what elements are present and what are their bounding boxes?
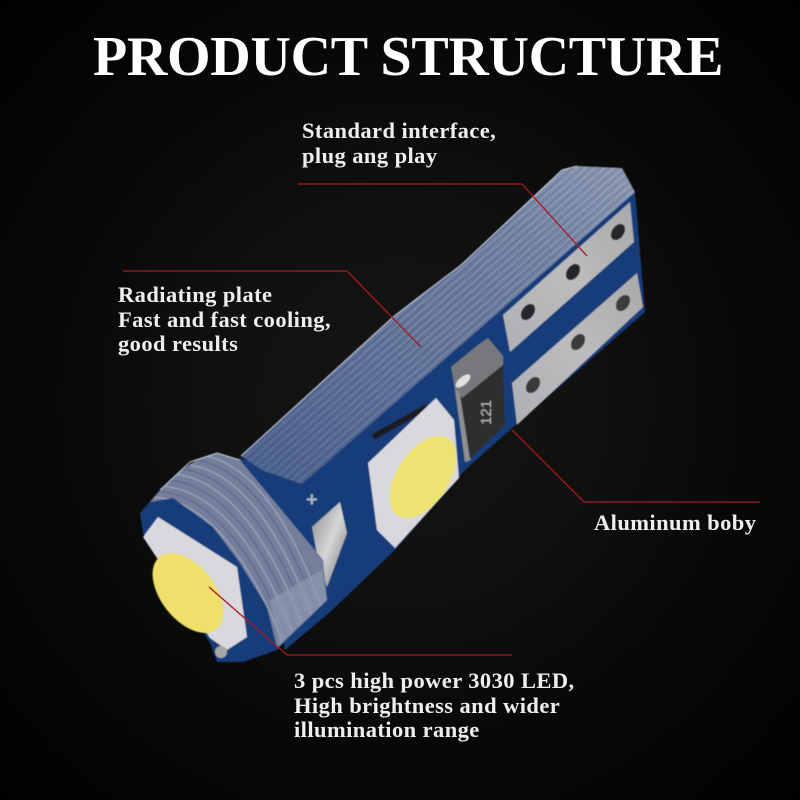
front LED chip bbox=[138, 517, 247, 658]
label: LED: 3 pcs high power 3030 LED, bbox=[294, 668, 575, 693]
label: LED: illumination range bbox=[294, 717, 480, 742]
product photo: T5 LED bulb bbox=[123, 164, 760, 663]
middle LED chip bbox=[368, 398, 470, 548]
resistor bbox=[451, 338, 505, 462]
leader line: LED bbox=[209, 587, 512, 655]
resistor: 121 bbox=[478, 400, 495, 425]
radiating plate bbox=[241, 166, 635, 484]
label: radiating plate: Fast and fast cooling, bbox=[118, 306, 331, 332]
leader line: radiating plate bbox=[123, 271, 421, 347]
label: standard interface: plug ang play bbox=[302, 142, 438, 168]
leader line: standard interface bbox=[298, 184, 587, 256]
label: radiating plate: good results bbox=[118, 331, 238, 356]
label: standard interface: Standard interface, bbox=[302, 118, 496, 143]
label: radiating plate: Radiating plate bbox=[118, 282, 272, 307]
label: LED bbox=[294, 668, 575, 742]
leader line: aluminum body bbox=[512, 430, 760, 502]
end cap bbox=[140, 453, 327, 662]
label: standard interface bbox=[302, 118, 496, 168]
solder joint and plus mark bbox=[306, 489, 347, 587]
label: radiating plate bbox=[118, 282, 331, 356]
label: LED: High brightness and wider bbox=[294, 692, 560, 718]
solder joint and plus mark: + bbox=[306, 489, 318, 511]
circuit board bbox=[240, 192, 645, 650]
label: aluminum body: Aluminum boby bbox=[594, 510, 756, 535]
solder pads bbox=[503, 202, 643, 425]
title: PRODUCT STRUCTURE bbox=[93, 26, 723, 88]
